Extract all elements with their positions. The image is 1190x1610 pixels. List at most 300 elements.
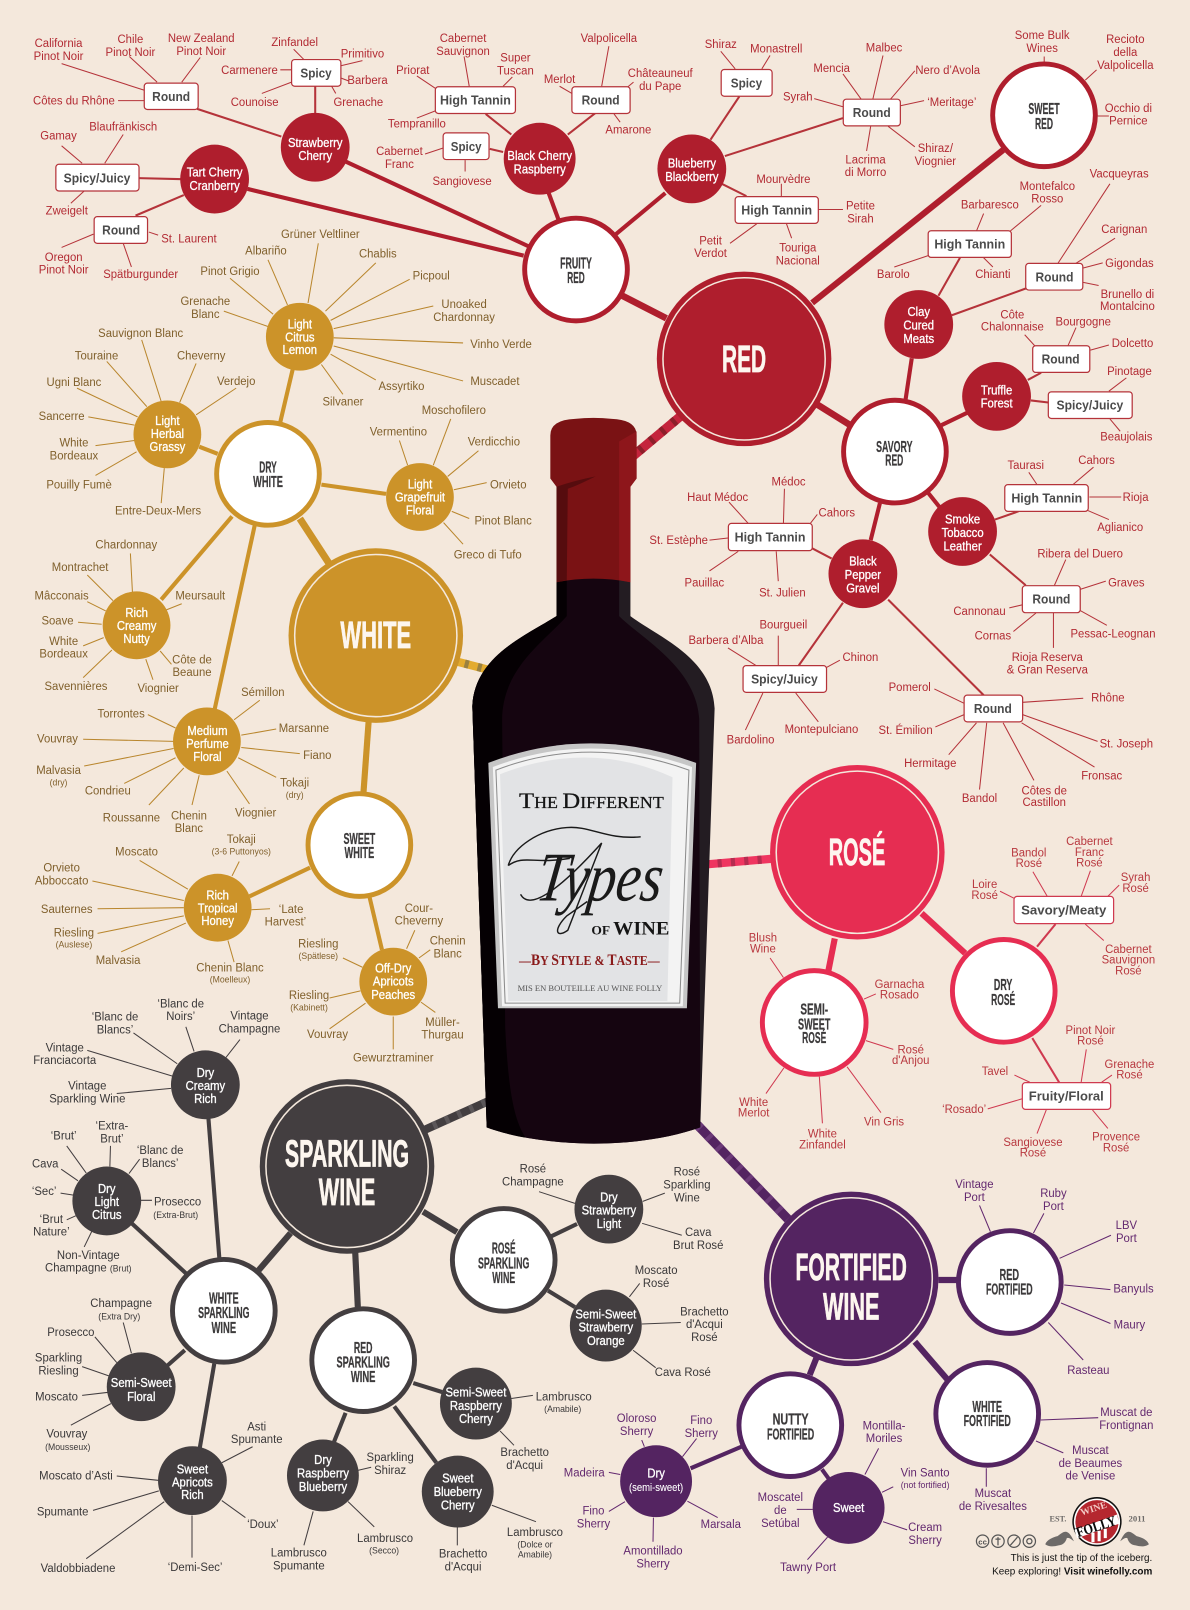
rosé cluster: Savory/Meaty under Dry Rosé: Cabernet <box>1066 834 1113 848</box>
red cluster: Black Cherry Raspberry: Cabernet <box>376 144 423 158</box>
red cluster: Strawberry Cherry: Barbera <box>347 73 388 87</box>
white cluster: Light Grapefruit Floral: Greco di Tufo <box>454 547 522 562</box>
white cluster: Rich Tropical Honey: Tropical <box>198 901 238 915</box>
main circle: Sparkling Wine <box>260 1079 434 1254</box>
white cluster: Rich Tropical Honey: Riesling <box>54 925 94 940</box>
main circle: White <box>289 548 463 723</box>
sparkling cluster: Dry Creamy Rich: Vintage <box>230 1008 269 1023</box>
rosé labels: Semi-Sweet Rosé wines <box>738 930 929 1152</box>
white cluster: Medium Perfume Floral <box>36 685 332 835</box>
red cluster: Black Pepper Gravel: Montepulciano <box>785 722 859 736</box>
rosé cluster: Fruity/Floral under Dry Rosé: ‘Rosado’ <box>942 1102 986 1116</box>
sparkling cluster: Sweet Apricots Rich: Sweet <box>177 1462 208 1477</box>
sparkling cluster: Dry Creamy Rich: Franciacorta <box>33 1053 97 1067</box>
sparkling cluster: Dry Raspberry Blueberry: Spumante <box>273 1558 325 1573</box>
sparkling cluster: Sweet Apricots Rich: Spumante <box>37 1504 89 1519</box>
fortified cluster: Sweet: Setúbal <box>761 1515 800 1530</box>
style circle: Nutty Fortified <box>739 1374 842 1477</box>
white cluster: Off-Dry Apricots Peaches: Peaches <box>371 987 415 1002</box>
main circle: Red <box>657 272 831 446</box>
white cluster: Off-Dry Apricots Peaches: (Kabinett) <box>290 1002 328 1012</box>
white cluster: Light Grapefruit Floral: Light <box>408 477 432 492</box>
main circle: Fortified Wine: WINE <box>823 1286 879 1328</box>
white cluster: Rich Tropical Honey: Harvest’ <box>265 914 306 929</box>
red cluster: Black Cherry Raspberry: Priorat <box>396 62 430 77</box>
red cluster: Blueberry Blackberry: Malbec <box>866 40 902 54</box>
white cluster: Rich Creamy Nutty: Beaune <box>172 665 212 679</box>
rosé cluster: Fruity/Floral under Dry Rosé <box>942 1023 1155 1160</box>
sparkling cluster: Dry Strawberry Light: Brut Rosé <box>673 1238 724 1252</box>
style circle: Rosé Sparkling Wine: SPARKLING <box>478 1255 529 1272</box>
sparkling cluster: Dry Light Citrus <box>32 1118 202 1275</box>
red cluster: Black Cherry Raspberry: Raspberry <box>514 162 567 177</box>
style circle: Dry White <box>217 423 319 525</box>
fortified cluster: Dry (semi-sweet): Marsala <box>701 1516 741 1531</box>
style circle: Rosé Sparkling Wine <box>452 1209 555 1311</box>
fortified cluster: Sweet <box>758 1418 950 1574</box>
white cluster: Rich Tropical Honey <box>35 832 306 985</box>
white cluster: Light Citrus Lemon: Light <box>288 317 312 332</box>
red labels: Sweet Red grapes: Valpolicella <box>1097 57 1154 72</box>
bottle label <box>488 743 696 1008</box>
rosé labels: Semi-Sweet Rosé wines: Vin Gris <box>864 1114 904 1128</box>
white cluster: Medium Perfume Floral: Perfume <box>186 736 229 751</box>
Wine Folly logo: FOLLY <box>1074 1513 1119 1541</box>
red cluster: Blueberry Blackberry: Round <box>853 105 891 120</box>
fortified labels: White Fortified wines: Muscat de <box>1100 1404 1152 1419</box>
sparkling cluster: Semi-Sweet Strawberry Orange: Cava Rosé <box>655 1364 711 1379</box>
red cluster: Black Pepper Gravel: High Tannin <box>735 530 805 545</box>
sparkling cluster: Dry Raspberry Blueberry: Blueberry <box>299 1479 348 1494</box>
red cluster: Clay Cured Meats: Brunello di <box>1101 286 1154 301</box>
red cluster: Clay Cured Meats: Chianti <box>975 267 1010 281</box>
red cluster: Blueberry Blackberry: Sirah <box>847 211 874 225</box>
sparkling cluster: Dry Creamy Rich: Rich <box>194 1091 217 1106</box>
red cluster: Clay Cured Meats: Round <box>1035 269 1073 284</box>
red cluster: Black Pepper Gravel: Spicy/Juicy <box>751 672 818 687</box>
white cluster: Medium Perfume Floral: Blanc <box>175 821 203 835</box>
fortified labels: White Fortified wines: de Venise <box>1066 1468 1116 1483</box>
fortified labels: Red Fortified wines: Ruby <box>1040 1186 1067 1200</box>
sparkling cluster: Dry Creamy Rich: Dry <box>197 1065 214 1080</box>
red cluster: Black Cherry Raspberry: Sangiovese <box>432 173 492 188</box>
fortified cluster: Sweet: Montilla- <box>863 1418 905 1432</box>
style circle: Savory Red <box>844 400 946 503</box>
main circle: Fortified Wine <box>764 1192 938 1366</box>
red cluster: Black Cherry Raspberry: Franc <box>385 156 414 171</box>
red cluster: Black Cherry Raspberry: Black Cherry <box>507 149 572 163</box>
sparkling cluster: Dry Strawberry Light: Strawberry <box>582 1203 637 1218</box>
sparkling cluster: Semi-Sweet Floral: Floral <box>127 1389 155 1404</box>
white cluster: Light Citrus Lemon: Citrus <box>285 330 315 345</box>
rosé labels: Semi-Sweet Rosé wines: White <box>808 1126 837 1141</box>
rosé labels: Semi-Sweet Rosé wines: Rosado <box>880 987 919 1002</box>
red cluster: Smoke Tobacco Leather: & Gran Reserva <box>1007 662 1088 677</box>
fortified cluster: Dry (semi-sweet): Sherry <box>636 1556 670 1571</box>
fortified cluster: Sweet: Moriles <box>866 1431 902 1445</box>
white cluster: Medium Perfume Floral: Fiano <box>303 747 332 762</box>
white cluster: Light Herbal Grassy: Sauvignon Blanc <box>98 325 183 340</box>
red cluster: Smoke Tobacco Leather: Cannonau <box>953 604 1006 618</box>
style circle: Dry White: WHITE <box>253 474 283 491</box>
white cluster: Rich Creamy Nutty: White <box>49 633 78 648</box>
fortified cluster: Sweet: de <box>774 1503 787 1517</box>
red cluster: Smoke Tobacco Leather: High Tannin <box>1011 491 1082 506</box>
white cluster: Light Herbal Grassy: Herbal <box>151 426 184 441</box>
red cluster: Smoke Tobacco Leather: Pessac-Leognan <box>1070 626 1155 641</box>
red cluster: Clay Cured Meats: Gigondas <box>1105 256 1154 270</box>
sparkling cluster: Semi-Sweet Floral: Champagne <box>90 1296 152 1310</box>
main circle: Rosé <box>770 765 945 940</box>
red cluster: Blueberry Blackberry: ‘Meritage’ <box>927 94 976 109</box>
white cluster: Light Grapefruit Floral: Moschofilero <box>422 402 486 417</box>
fortified cluster: Dry (semi-sweet): Dry <box>647 1466 666 1481</box>
sparkling cluster: Dry Strawberry Light: Dry <box>600 1190 618 1205</box>
sparkling cluster: Semi-Sweet Raspberry Cherry: Raspberry <box>450 1398 503 1413</box>
style circle: Sweet White: WHITE <box>344 845 374 862</box>
wine bottle <box>472 418 715 1144</box>
sparkling cluster: Dry Strawberry Light: Rosé <box>674 1164 700 1179</box>
white cluster: Off-Dry Apricots Peaches: Off-Dry <box>375 961 411 976</box>
white cluster: Light Citrus Lemon: Vinho Verde <box>470 337 532 351</box>
white cluster: Medium Perfume Floral: Tokaji <box>280 775 309 790</box>
red cluster: Blueberry Blackberry: Nero d’Avola <box>915 62 980 77</box>
fortified cluster: Dry (semi-sweet): Fino <box>690 1413 712 1427</box>
fortified cluster: Sweet: Vin Santo <box>901 1465 950 1480</box>
red cluster: Blueberry Blackberry: Shiraz/ <box>918 141 953 155</box>
red cluster: Blueberry Blackberry: Blackberry <box>665 170 719 184</box>
white cluster: Rich Tropical Honey: (3-6 Puttonyos) <box>212 846 271 856</box>
red cluster: Black Pepper Gravel: Pomerol <box>889 680 931 694</box>
red cluster: Truffle Forest: Bourgogne <box>1056 314 1111 329</box>
rosé cluster: Fruity/Floral under Dry Rosé: Provence <box>1092 1129 1140 1144</box>
sparkling cluster: Semi-Sweet Floral: Prosecco <box>47 1324 95 1339</box>
sparkling cluster: Semi-Sweet Raspberry Cherry: Semi-Sweet <box>446 1385 506 1400</box>
red cluster: Strawberry Cherry: Pinot Noir <box>106 45 155 59</box>
style circle: Sweet Red <box>993 64 1095 167</box>
rosé cluster: Fruity/Floral under Dry Rosé: Fruity/Floral <box>1029 1089 1104 1104</box>
label script title: Types <box>508 827 669 934</box>
white cluster: Rich Creamy Nutty: Montrachet <box>52 559 109 574</box>
established year text <box>1049 1514 1146 1524</box>
white cluster: Rich Tropical Honey: (Auslese) <box>56 939 92 950</box>
white cluster: Off-Dry Apricots Peaches: Müller- <box>425 1014 460 1029</box>
white cluster: Light Herbal Grassy: Cheverny <box>177 348 226 362</box>
sparkling cluster: Dry Light Citrus: (Extra-Brut) <box>153 1209 198 1220</box>
label title: The Different: THE DIFFERENT <box>519 788 664 813</box>
white cluster: Rich Tropical Honey: Rich <box>206 888 229 903</box>
sparkling cluster: Dry Raspberry Blueberry: Sparkling <box>367 1450 414 1464</box>
red cluster: Black Cherry Raspberry: High Tannin <box>440 93 511 108</box>
style circle: Dry White: DRY <box>259 459 277 476</box>
style circle: Semi-Sweet Rosé: ROSÉ <box>802 1028 826 1047</box>
style circle: Red Fortified <box>958 1231 1061 1333</box>
main circle: Sparkling Wine: SPARKLING <box>285 1133 409 1175</box>
white cluster: Light Citrus Lemon: Lemon <box>283 343 317 357</box>
fortified cluster: Dry (semi-sweet): Sherry <box>577 1516 610 1530</box>
sparkling cluster: Dry Raspberry Blueberry: (Secco) <box>369 1545 399 1556</box>
sparkling cluster: Semi-Sweet Strawberry Orange: Brachetto <box>680 1304 729 1318</box>
style circle: Sweet Red: SWEET <box>1028 101 1060 118</box>
red cluster: Black Cherry Raspberry: Amarone <box>605 122 652 137</box>
style circle: Savory Red: RED <box>885 453 903 470</box>
fortified cluster: Dry (semi-sweet): Amontillado <box>623 1543 683 1558</box>
red cluster: Blueberry Blackberry: Mourvèdre <box>756 171 811 186</box>
sparkling cluster: Dry Light Citrus: ‘Brut <box>40 1211 63 1226</box>
fortified labels: White Fortified wines: de Beaumes <box>1059 1455 1122 1470</box>
rosé cluster: Savory/Meaty under Dry Rosé: Rosé <box>971 888 998 902</box>
rosé cluster: Savory/Meaty under Dry Rosé: Loire <box>972 877 997 891</box>
red cluster: Strawberry Cherry: Round <box>152 89 190 104</box>
red cluster: Clay Cured Meats: Montefalco <box>1020 179 1075 193</box>
red cluster: Clay Cured Meats: Vacqueyras <box>1090 166 1149 181</box>
red cluster: Tart Cherry Cranberry: Oregon <box>45 249 83 264</box>
white cluster: Light Grapefruit Floral: Floral <box>406 503 434 518</box>
sparkling cluster: Sweet Apricots Rich: Apricots <box>172 1475 213 1489</box>
white cluster: Light Citrus Lemon <box>180 227 532 409</box>
rosé cluster: Fruity/Floral under Dry Rosé: Rosé <box>1077 1033 1104 1048</box>
red cluster: Blueberry Blackberry <box>657 37 980 268</box>
white cluster: Rich Tropical Honey: Tokaji <box>227 832 256 846</box>
label subtitle: By Style and Taste: —BY STYLE & TASTE— <box>518 952 660 969</box>
label title: of Wine: OF WINE <box>591 918 669 938</box>
red cluster: Blueberry Blackberry: Blueberry <box>668 156 716 171</box>
fortified labels: White Fortified wines: Muscat <box>975 1486 1011 1500</box>
sparkling cluster: Sweet Blueberry Cherry <box>422 1456 563 1574</box>
sparkling cluster: Dry Light Citrus: Blancs’ <box>142 1155 178 1170</box>
sparkling cluster: Semi-Sweet Floral: Riesling <box>38 1363 79 1377</box>
sparkling cluster: Dry Light Citrus: Champagne (Brut) <box>45 1260 132 1275</box>
white cluster: Off-Dry Apricots Peaches: Riesling <box>289 988 329 1002</box>
red cluster: Blueberry Blackberry: Monastrell <box>750 41 802 55</box>
white cluster: Light Grapefruit Floral <box>370 402 532 562</box>
red cluster: Strawberry Cherry: Côtes du Rhône <box>33 93 115 108</box>
white cluster: Rich Creamy Nutty: Nutty <box>123 631 151 646</box>
fortified cluster: Dry (semi-sweet): Sherry <box>685 1426 718 1440</box>
red cluster: Black Pepper Gravel: Bardolino <box>727 732 775 747</box>
red cluster: Black Cherry Raspberry: du Pape <box>639 78 682 93</box>
white cluster: Light Grapefruit Floral: Verdicchio <box>468 434 520 449</box>
red cluster: Strawberry Cherry: Spicy <box>300 66 332 81</box>
white cluster: Medium Perfume Floral: Floral <box>193 749 222 764</box>
sparkling cluster: Dry Light Citrus: ‘Extra- <box>96 1118 128 1133</box>
red cluster: Smoke Tobacco Leather <box>928 453 1155 677</box>
sparkling cluster: Semi-Sweet Raspberry Cherry <box>440 1368 592 1472</box>
main circle: Fortified Wine: FORTIFIED <box>795 1247 907 1289</box>
red cluster: Smoke Tobacco Leather: Round <box>1032 592 1070 607</box>
red cluster: Strawberry Cherry: Zinfandel <box>271 35 318 49</box>
white cluster: Light Citrus Lemon: Silvaner <box>322 394 363 409</box>
rosé cluster: Savory/Meaty under Dry Rosé: Savory/Meaty <box>1021 902 1107 917</box>
white cluster: Medium Perfume Floral: Marsanne <box>279 721 330 735</box>
fortified labels: Red Fortified wines: Port <box>1043 1199 1065 1213</box>
sparkling cluster: Dry Raspberry Blueberry: Shiraz <box>374 1463 406 1477</box>
red cluster: Truffle Forest: Truffle <box>981 383 1012 397</box>
rosé cluster: Savory/Meaty under Dry Rosé: Rosé <box>1115 963 1142 978</box>
sparkling cluster: Sweet Apricots Rich: Rich <box>181 1487 204 1502</box>
sparkling cluster: Dry Creamy Rich: Sparkling Wine <box>49 1091 126 1105</box>
sparkling cluster: Semi-Sweet Raspberry Cherry: Brachetto <box>500 1445 549 1459</box>
white cluster: Rich Creamy Nutty: Bordeaux <box>39 646 88 661</box>
white cluster: Rich Tropical Honey: ‘Late <box>279 901 303 916</box>
white cluster: Rich Tropical Honey: Sauternes <box>41 901 93 916</box>
red cluster: Strawberry Cherry <box>33 31 388 182</box>
established year text: 2011 <box>1129 1514 1146 1524</box>
sparkling cluster: Semi-Sweet Floral: Semi-Sweet <box>111 1376 172 1390</box>
sparkling cluster: Dry Creamy Rich: Vintage <box>46 1040 84 1055</box>
style circle: Fruity Red <box>525 218 627 321</box>
white cluster: Medium Perfume Floral: (dry) <box>50 777 67 788</box>
sparkling cluster: Semi-Sweet Floral <box>35 1296 176 1452</box>
white cluster: Rich Creamy Nutty: Chardonnay <box>95 537 157 551</box>
fortified labels: Red Fortified wines: Vintage <box>955 1177 994 1191</box>
red cluster: Black Pepper Gravel: Bandol <box>962 790 997 805</box>
white cluster: Light Herbal Grassy: Pouilly Fumè <box>46 477 112 492</box>
red cluster: Smoke Tobacco Leather: Rioja Reserva <box>1012 650 1083 664</box>
rosé cluster: Fruity/Floral under Dry Rosé: Tavel <box>982 1064 1008 1078</box>
style circle: Red Sparkling Wine: WINE <box>351 1369 375 1386</box>
sparkling cluster: Dry Light Citrus: Dry <box>98 1181 116 1196</box>
red cluster: Clay Cured Meats: Rosso <box>1031 191 1064 205</box>
white cluster: Light Herbal Grassy: Verdejo <box>217 374 256 388</box>
sparkling cluster: Dry Strawberry Light: Sparkling <box>663 1177 711 1192</box>
red labels: Sweet Red grapes: Occhio di <box>1105 100 1152 115</box>
red cluster: Tart Cherry Cranberry: St. Laurent <box>161 231 217 245</box>
white cluster: Medium Perfume Floral: Roussanne <box>103 810 160 825</box>
fortified cluster: Sweet: (not fortified) <box>901 1479 949 1490</box>
red cluster: Tart Cherry Cranberry: Tart Cherry <box>187 165 243 180</box>
style circle: Semi-Sweet Rosé: SEMI- <box>800 1001 828 1018</box>
sparkling cluster: Dry Creamy Rich: ‘Blanc de <box>157 996 204 1010</box>
sparkling cluster: Dry Light Citrus: Prosecco <box>154 1194 201 1209</box>
rosé cluster: Savory/Meaty under Dry Rosé: Franc <box>1075 844 1104 859</box>
established year text: EST. <box>1049 1515 1066 1524</box>
style circle: Red Sparkling Wine <box>312 1309 414 1412</box>
red cluster: Clay Cured Meats: High Tannin <box>934 236 1005 251</box>
white cluster: Off-Dry Apricots Peaches: Riesling <box>298 936 338 951</box>
red cluster: Blueberry Blackberry: Mencia <box>813 60 850 75</box>
red cluster: Truffle Forest: Dolcetto <box>1112 336 1154 350</box>
rosé labels: Semi-Sweet Rosé wines: Blush <box>749 930 777 945</box>
red cluster: Black Cherry Raspberry: Merlot <box>544 72 576 86</box>
style circle: White Fortified: WHITE <box>972 1399 1002 1416</box>
red cluster: Tart Cherry Cranberry <box>39 119 249 281</box>
rosé cluster: Savory/Meaty under Dry Rosé: Sauvignon <box>1102 952 1155 967</box>
fortified labels: White Fortified wines <box>959 1404 1153 1513</box>
red cluster: Clay Cured Meats: Barbaresco <box>961 197 1019 212</box>
rosé cluster: Savory/Meaty under Dry Rosé: Rosé <box>1016 856 1042 870</box>
red cluster: Black Cherry Raspberry: Châteauneuf <box>628 66 693 80</box>
red cluster: Black Pepper Gravel: Côtes de <box>1022 783 1067 798</box>
white cluster: Medium Perfume Floral: Chenin <box>171 808 207 822</box>
sparkling cluster: Dry Light Citrus: Citrus <box>92 1207 122 1222</box>
sparkling cluster: Sweet Blueberry Cherry: Brachetto <box>439 1546 487 1561</box>
sparkling cluster: Sweet Apricots Rich: Asti <box>247 1419 266 1433</box>
white cluster: Light Citrus Lemon: Muscadet <box>470 374 520 388</box>
style circle: Red Fortified: RED <box>1000 1267 1019 1284</box>
sparkling cluster: Dry Light Citrus: Nature’ <box>33 1224 70 1239</box>
rosé cluster: Fruity/Floral under Dry Rosé: Rosé <box>1020 1145 1047 1160</box>
white cluster: Light Herbal Grassy: Bordeaux <box>50 448 98 463</box>
sparkling cluster: Semi-Sweet Floral: Vouvray <box>46 1426 87 1441</box>
red cluster: Blueberry Blackberry: Nacional <box>776 253 820 268</box>
sparkling cluster: Semi-Sweet Strawberry Orange: Rosé <box>691 1330 718 1344</box>
red cluster: Black Pepper Gravel: Médoc <box>772 474 806 489</box>
red cluster: Black Pepper Gravel: St. Joseph <box>1100 736 1153 751</box>
red cluster: Strawberry Cherry: Carmenere <box>221 62 278 77</box>
decorative flourishes beside logo <box>1045 1532 1149 1546</box>
sparkling cluster: Semi-Sweet Strawberry Orange: d'Acqui <box>686 1317 723 1331</box>
red cluster: Blueberry Blackberry: Petit <box>699 233 722 247</box>
rosé cluster: Savory/Meaty under Dry Rosé: Bandol <box>1011 845 1046 859</box>
style circle: Dry Rosé: ROSÉ <box>991 990 1015 1009</box>
red cluster: Black Pepper Gravel: Bourgueil <box>759 617 807 632</box>
red cluster: Clay Cured Meats <box>877 166 1155 359</box>
fortified labels: White Fortified wines: Muscat <box>1072 1442 1109 1457</box>
white cluster: Light Citrus Lemon: Assyrtiko <box>379 379 425 393</box>
red cluster: Strawberry Cherry: Pinot Noir <box>34 49 83 63</box>
style circle: Rosé Sparkling Wine: WINE <box>492 1270 515 1287</box>
sparkling cluster: Semi-Sweet Floral: (Mousseux) <box>45 1441 90 1452</box>
red cluster: Black Pepper Gravel: Barbera d’Alba <box>688 632 764 647</box>
footer note: This is just the tip of the iceberg. <box>1011 1553 1152 1564</box>
red cluster: Truffle Forest <box>962 307 1154 444</box>
style circle: Nutty Fortified: NUTTY <box>773 1412 809 1429</box>
rosé cluster: Fruity/Floral under Dry Rosé: Rosé <box>1116 1067 1143 1082</box>
red cluster: Blueberry Blackberry: di Morro <box>845 165 887 179</box>
fortified cluster: Sweet: Sweet <box>833 1500 865 1515</box>
white cluster: Light Grapefruit Floral: Vermentino <box>370 424 427 438</box>
sparkling cluster: Dry Creamy Rich <box>33 996 281 1119</box>
sparkling cluster: Dry Light Citrus: ‘Brut’ <box>51 1128 77 1143</box>
sparkling cluster: Dry Strawberry Light: Rosé <box>520 1161 546 1176</box>
red cluster: Clay Cured Meats: Meats <box>903 331 934 346</box>
style circle: Rosé Sparkling Wine: ROSÉ <box>492 1239 516 1258</box>
Wine Folly logo: WINE <box>1079 1500 1108 1518</box>
white cluster: Rich Tropical Honey: Abboccato <box>35 873 89 888</box>
white cluster: Rich Tropical Honey: Moscato <box>115 844 158 858</box>
white cluster: Rich Creamy Nutty: Savennières <box>44 679 108 693</box>
red cluster: Smoke Tobacco Leather: Graves <box>1108 575 1145 589</box>
rosé cluster: Savory/Meaty under Dry Rosé: Syrah <box>1121 870 1150 884</box>
white cluster: Off-Dry Apricots Peaches: Cour- <box>405 900 433 915</box>
fortified cluster: Dry (semi-sweet): Madeira <box>564 1465 605 1480</box>
fortified labels: Red Fortified wines: Banyuls <box>1113 1281 1154 1296</box>
red cluster: Blueberry Blackberry: Shiraz <box>705 37 737 51</box>
sparkling cluster: Dry Creamy Rich: Vintage <box>68 1078 106 1093</box>
rosé labels: Semi-Sweet Rosé wines: White <box>739 1094 768 1109</box>
white cluster: Light Grapefruit Floral: Pinot Blanc <box>474 513 532 528</box>
label footer: Mis En Bouteille: MIS EN BOUTEILLE AU WINE FOLLY <box>518 984 662 993</box>
red cluster: Black Pepper Gravel: Hermitage <box>904 756 957 770</box>
red cluster: Clay Cured Meats: Cured <box>903 318 934 333</box>
main circle: White: WHITE <box>340 615 411 657</box>
red labels: Sweet Red grapes: della <box>1113 45 1138 59</box>
sparkling cluster: Semi-Sweet Raspberry Cherry: d'Acqui <box>506 1457 543 1472</box>
rosé cluster: Savory/Meaty under Dry Rosé: Cabernet <box>1105 941 1152 956</box>
red cluster: Smoke Tobacco Leather: Cahors <box>1078 453 1115 467</box>
white cluster: Light Citrus Lemon: Unoaked <box>441 297 487 311</box>
rosé cluster: Fruity/Floral under Dry Rosé: Grenache <box>1105 1056 1154 1071</box>
white cluster: Light Herbal Grassy: Sancerre <box>39 409 85 423</box>
style circle: Fruity Red: FRUITY <box>560 256 592 273</box>
fortified labels: White Fortified wines: Frontignan <box>1099 1417 1153 1432</box>
white cluster: Medium Perfume Floral: Sémillon <box>241 685 285 699</box>
red cluster: Smoke Tobacco Leather: Tobacco <box>942 525 984 540</box>
red cluster: Strawberry Cherry: Strawberry <box>288 135 343 150</box>
white cluster: Rich Tropical Honey: Malvasia <box>96 953 141 967</box>
fortified cluster: Sweet: Moscatel <box>758 1490 803 1504</box>
